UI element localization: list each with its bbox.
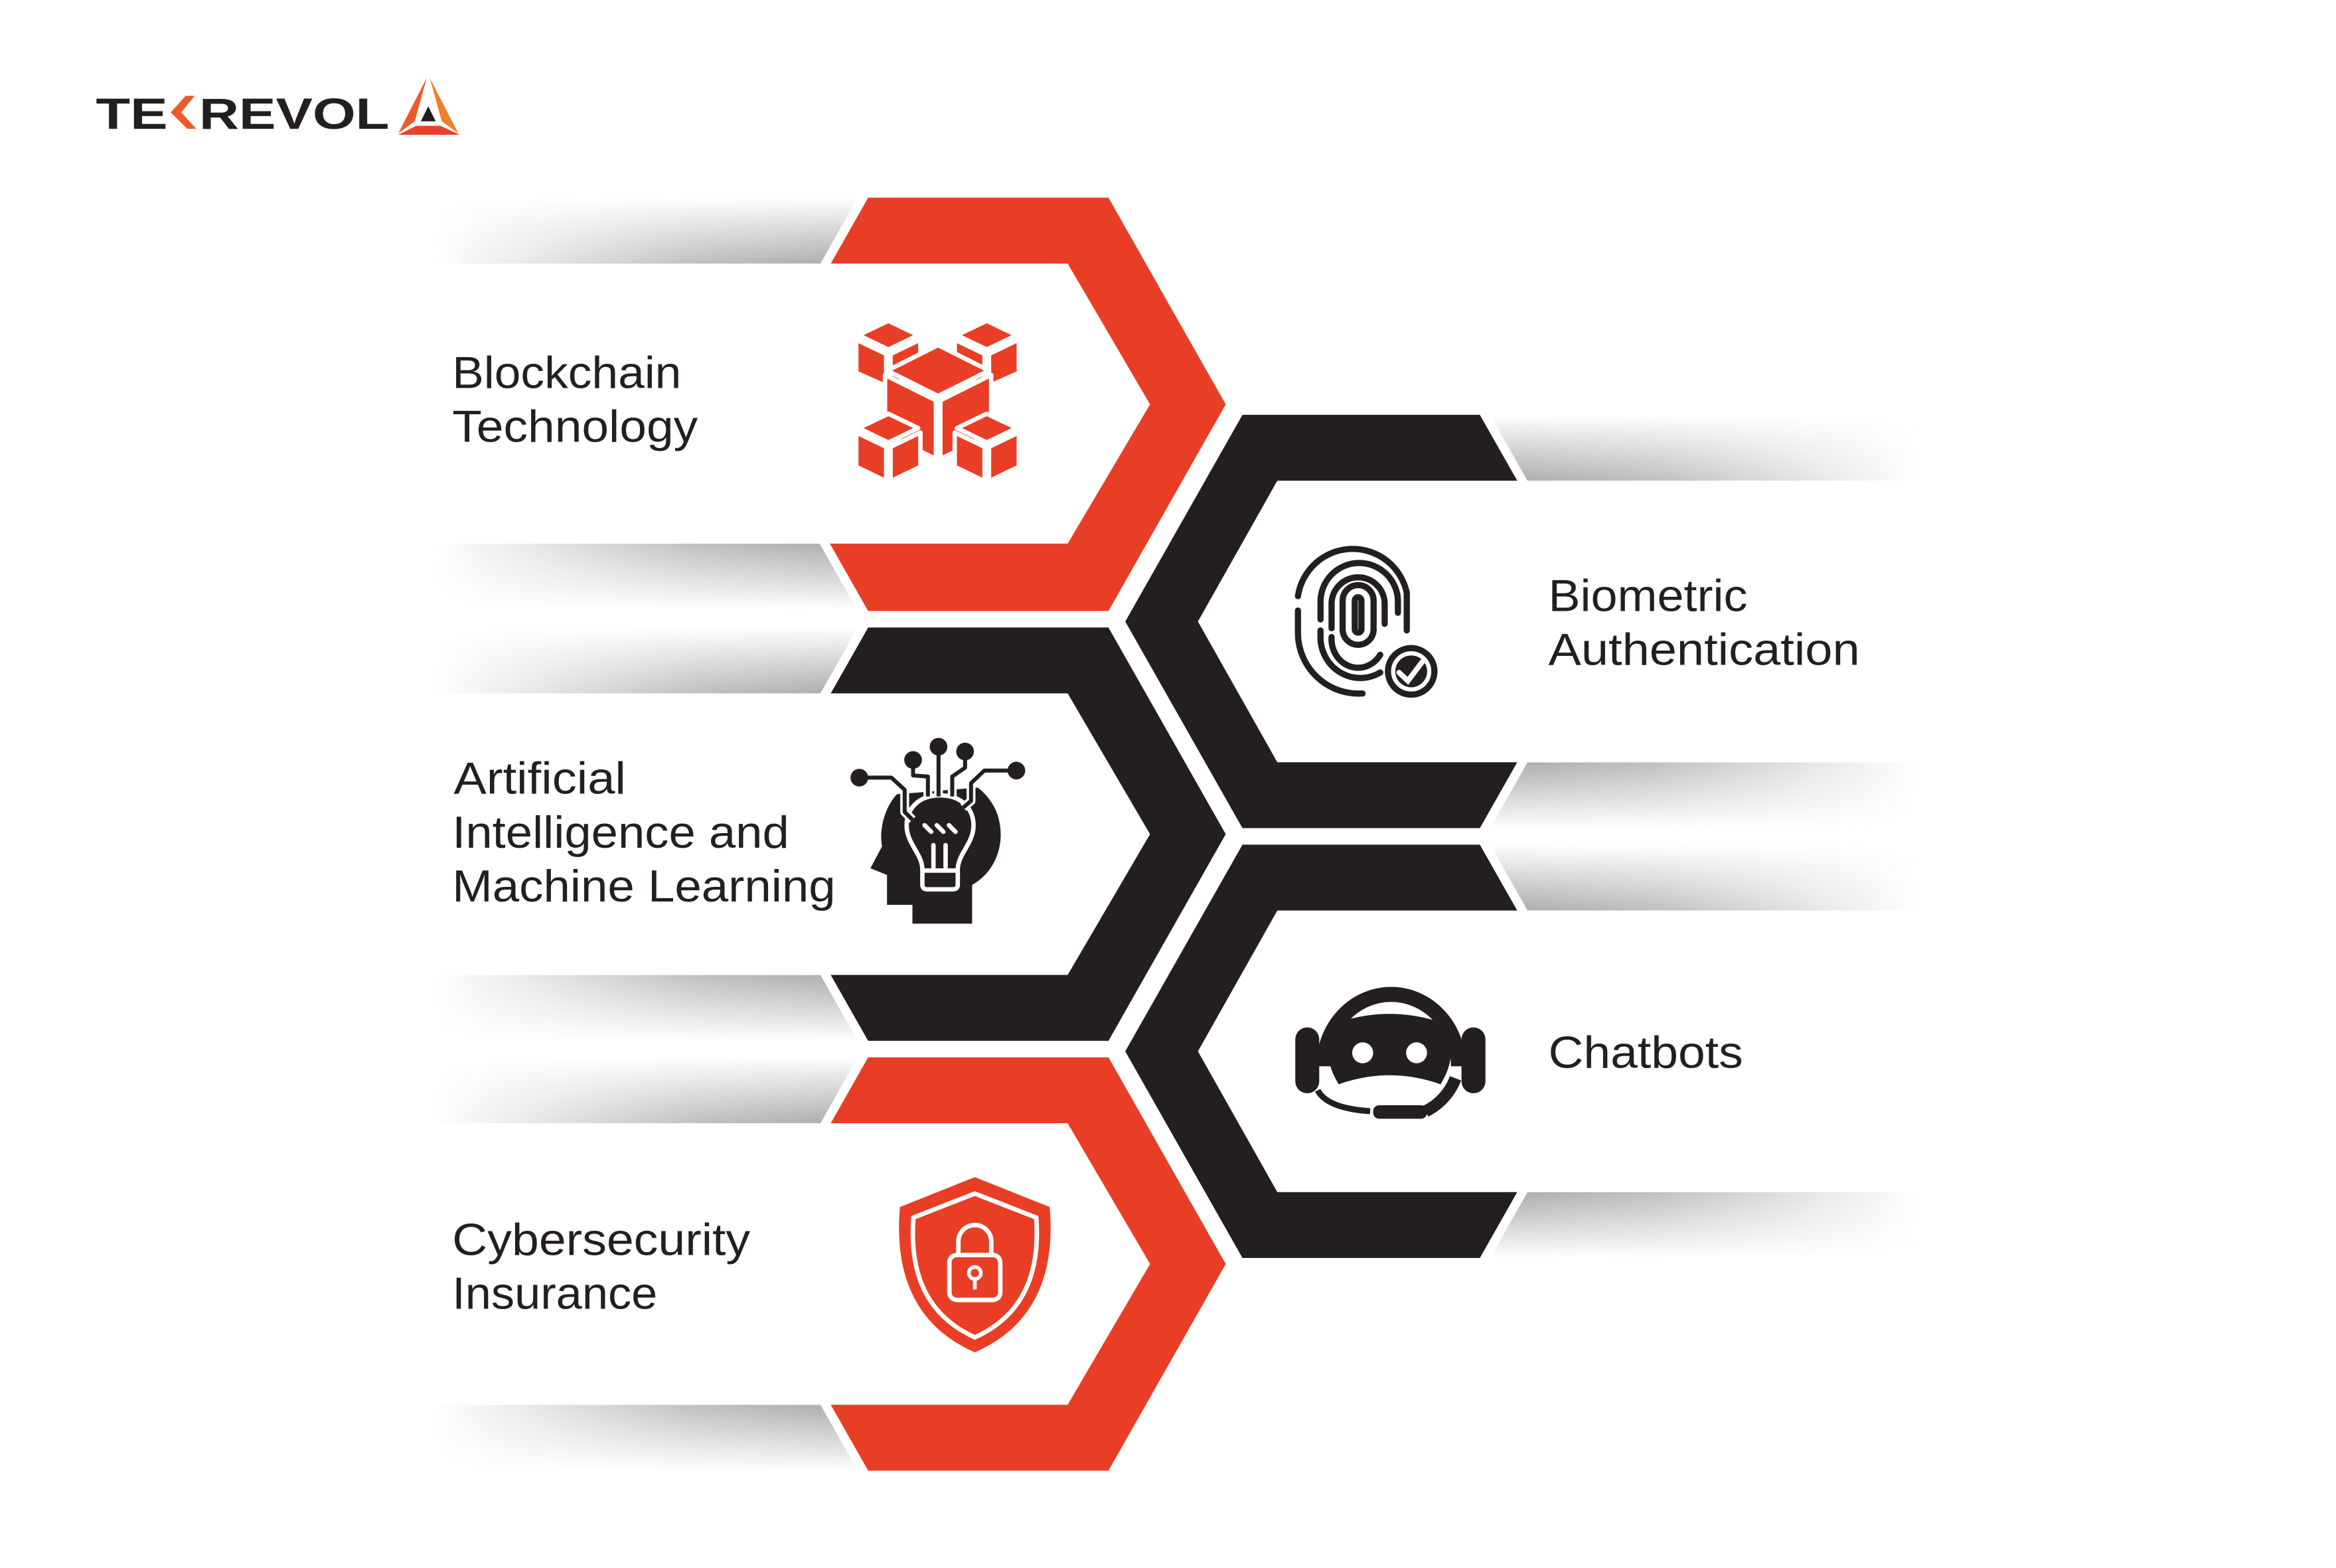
text: artificial intelligence: Machine Learning [452, 862, 836, 911]
logo [96, 78, 460, 138]
panel: chatbots [1120, 840, 1916, 1263]
text: blockchain: Blockchain [452, 348, 681, 398]
panel: blockchain technology [434, 193, 1231, 615]
text: authentication: Authentication [1548, 625, 1860, 675]
text: technology: Technology [452, 402, 698, 452]
text: artificial intelligence [452, 754, 836, 911]
text: biometric: Biometric [1548, 571, 1747, 621]
logo: REVOL [199, 90, 390, 138]
panel: biometric authentication [1120, 410, 1916, 832]
text: chatbots: Chatbots [1548, 1028, 1743, 1078]
text: cybersecurity insurance [452, 1215, 750, 1319]
icon: shield with lock [899, 1177, 1051, 1352]
text: cybersecurity insurance: Insurance [452, 1269, 657, 1319]
logo: TE [96, 90, 168, 138]
text: artificial intelligence: Artificial [453, 754, 626, 804]
icon: blockchain cubes [856, 321, 1019, 481]
text: artificial intelligence: Intelligence and [452, 808, 789, 858]
panel: cybersecurity insurance [434, 1053, 1231, 1475]
panel: artificial intelligence [434, 623, 1231, 1046]
icon: fingerprint [1298, 549, 1435, 694]
icon: chatbot headset [1295, 994, 1486, 1119]
icon: ai head with bulb [850, 738, 1025, 923]
text: cybersecurity insurance: Cybersecurity [452, 1215, 750, 1265]
shadows [434, 198, 1916, 1470]
